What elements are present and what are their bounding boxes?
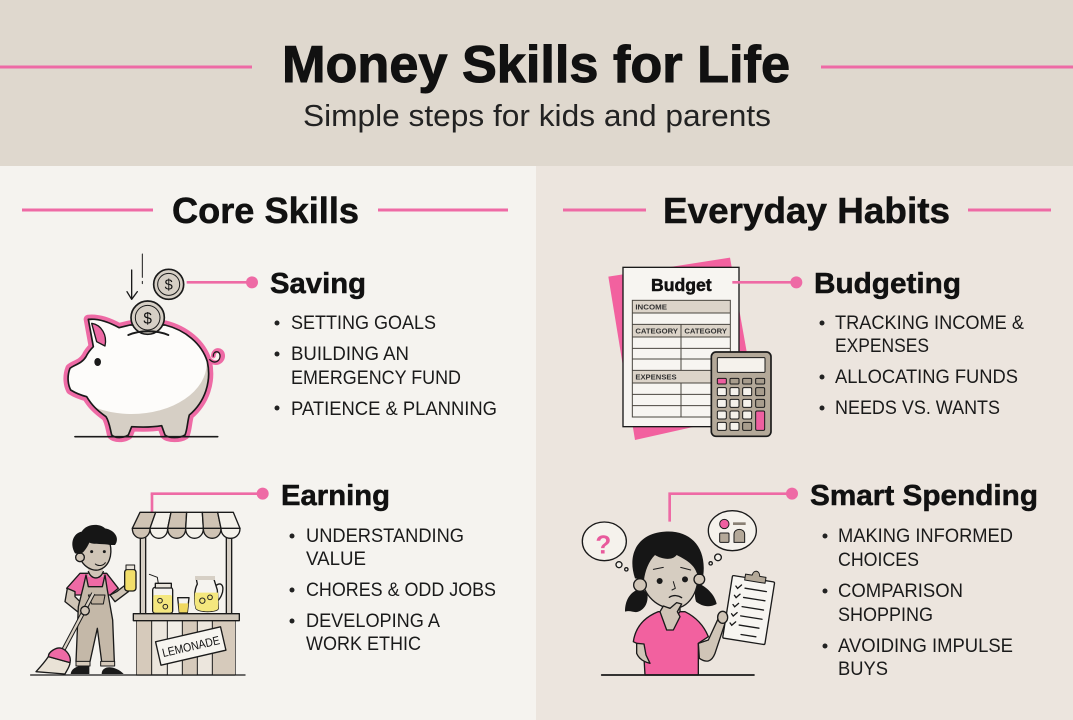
text block: Smart Spending: CHOICES	[838, 549, 919, 571]
girl	[625, 532, 776, 675]
title: Money Skills for Life	[282, 36, 790, 94]
text block: Earning: Earning	[281, 480, 390, 512]
background panels	[0, 166, 1073, 720]
text block: Earning: DEVELOPING A	[306, 610, 440, 632]
text block: Saving	[270, 268, 497, 420]
text block: Earning: CHORES & ODD JOBS	[306, 579, 496, 601]
heading: Core Skills: Core Skills	[172, 190, 359, 231]
thought bubble: question	[582, 522, 628, 571]
icon: budget sheet and calculator	[608, 258, 802, 440]
icon: piggy bank with coins: $	[165, 278, 173, 294]
icon: piggy bank with coins: $	[143, 310, 152, 327]
text block: Budgeting: ALLOCATING FUNDS	[835, 366, 1018, 388]
icon: piggy bank with coins	[57, 254, 258, 437]
header band	[0, 0, 1073, 166]
stand	[132, 512, 240, 675]
text block: Earning: WORK ETHIC	[306, 633, 421, 655]
sign: lemonade	[156, 627, 226, 665]
thought bubble: question: ?	[595, 529, 611, 559]
icon: budget sheet and calculator: EXPENSES	[635, 372, 677, 381]
text block: Budgeting: TRACKING INCOME &	[835, 312, 1024, 334]
clipboard	[723, 568, 776, 645]
text block: Smart Spending: BUYS	[838, 658, 888, 680]
text block: Saving: SETTING GOALS	[291, 312, 436, 334]
text block: Saving: EMERGENCY FUND	[291, 367, 461, 389]
icon: thinking girl with clipboard	[582, 488, 798, 675]
text block: Budgeting: EXPENSES	[835, 335, 929, 357]
boy with broom	[36, 525, 136, 674]
text block: Smart Spending: MAKING INFORMED	[838, 525, 1013, 547]
text block: Budgeting: Budgeting	[814, 268, 961, 300]
thought bubble: options	[708, 511, 756, 565]
text block: Saving: BUILDING AN	[291, 343, 409, 365]
subtitle: Simple steps for kids and parents	[303, 98, 771, 133]
text block: Earning	[281, 480, 496, 655]
text block: Saving: Saving	[270, 268, 366, 300]
icon: budget sheet and calculator: Budget	[651, 275, 712, 295]
text block: Smart Spending: AVOIDING IMPULSE	[838, 635, 1013, 657]
heading: Everyday Habits: Everyday Habits	[663, 190, 950, 231]
text block: Smart Spending: Smart Spending	[810, 480, 1038, 512]
text block: Smart Spending	[810, 480, 1038, 680]
icon: lemonade stand and boy	[31, 488, 269, 675]
text block: Smart Spending: SHOPPING	[838, 604, 933, 626]
drinks	[149, 574, 223, 613]
text block: Saving: PATIENCE & PLANNING	[291, 398, 497, 420]
sign: lemonade: LEMONADE	[161, 633, 221, 660]
text block: Smart Spending: COMPARISON	[838, 580, 963, 602]
icon: budget sheet and calculator: CATEGORY	[635, 326, 678, 335]
text block: Budgeting: NEEDS VS. WANTS	[835, 397, 1000, 419]
calculator	[711, 352, 771, 436]
icon: budget sheet and calculator: CATEGORY	[684, 326, 727, 335]
text block: Budgeting	[814, 268, 1024, 419]
icon: budget sheet and calculator: INCOME	[635, 302, 667, 311]
text block: Earning: UNDERSTANDING	[306, 525, 464, 547]
text block: Earning: VALUE	[306, 548, 366, 570]
